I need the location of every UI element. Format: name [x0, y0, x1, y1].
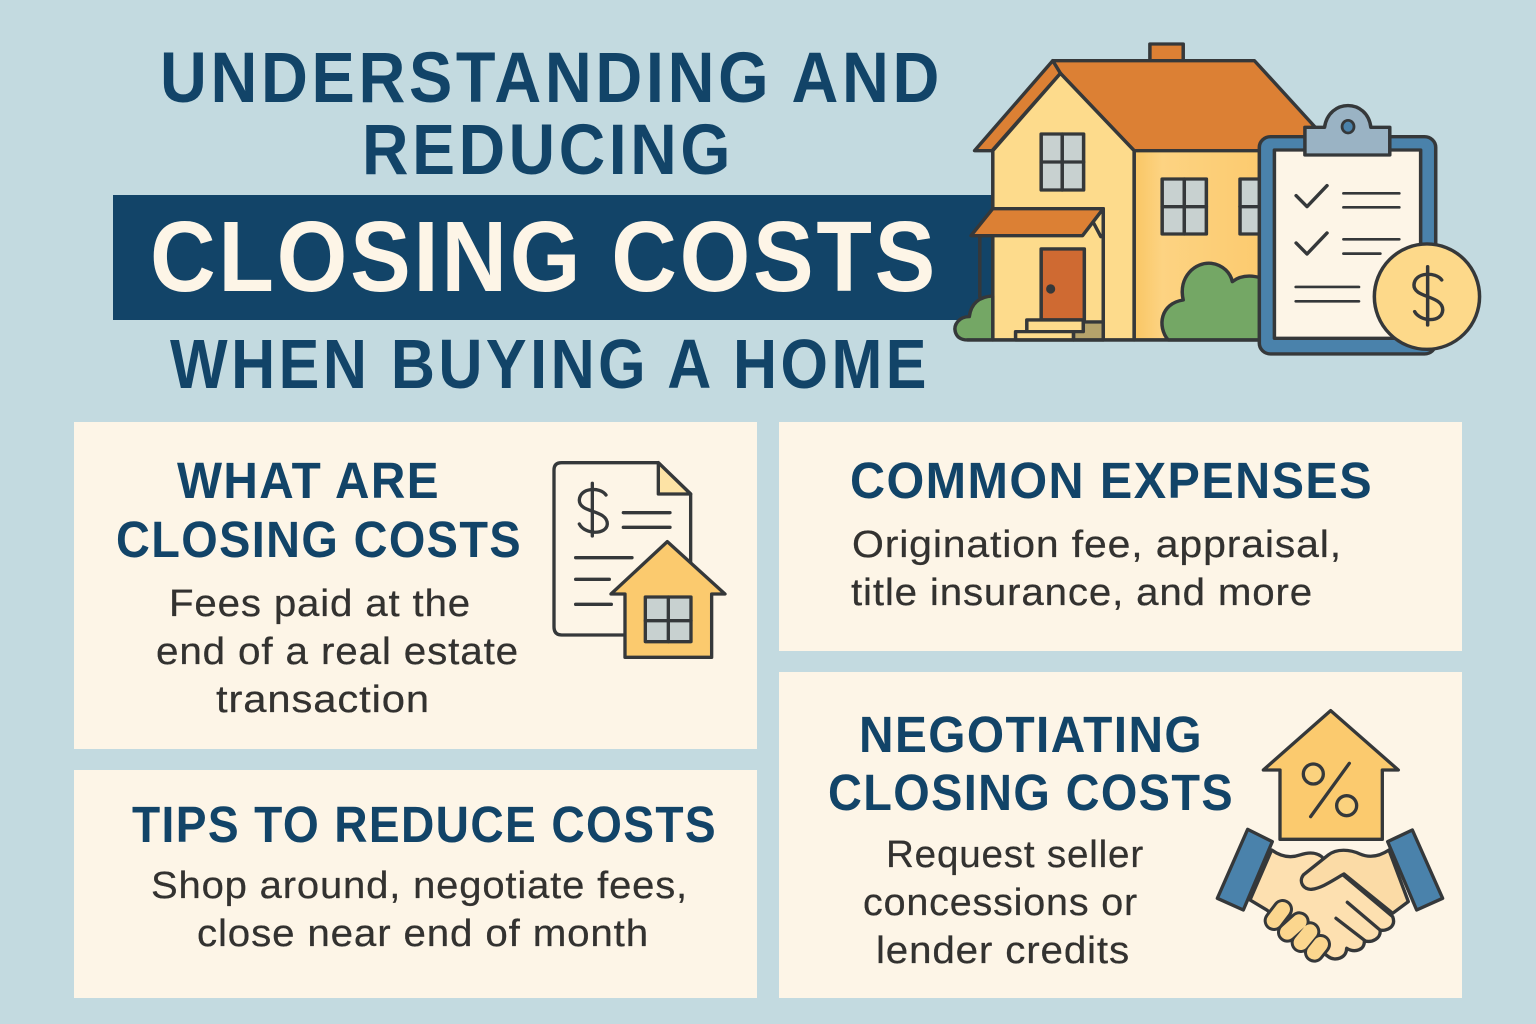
icon: dollar coin [1374, 244, 1480, 349]
icon: middle window [1162, 179, 1206, 234]
icon: right window [1240, 179, 1272, 234]
text block: Request seller [886, 834, 1144, 876]
icon: clipboard clip [1305, 106, 1390, 155]
heading [828, 706, 1234, 821]
text block: close near end of month [197, 913, 649, 955]
panel: common expenses [779, 422, 1462, 651]
text block: Shop around, negotiate fees, [151, 865, 688, 907]
text block [151, 865, 688, 955]
icon: house roof [975, 61, 1315, 151]
heading: NEGOTIATING [859, 706, 1203, 763]
icon: clipboard board [1259, 137, 1436, 354]
heading: CLOSING COSTS [828, 764, 1234, 821]
text block: end of a real estate [156, 631, 519, 673]
icon: handshake [1217, 829, 1443, 959]
icon: upper window [1041, 134, 1084, 190]
icon: roof ridge line [1053, 61, 1060, 73]
text block: transaction [216, 679, 430, 721]
icon: document with house [554, 463, 725, 657]
icon: right bush [1162, 263, 1262, 340]
heading [116, 452, 522, 568]
title line 4: WHEN BUYING A HOME [170, 325, 930, 403]
text block: Fees paid at the [169, 583, 471, 625]
heading: WHAT ARE [177, 452, 440, 509]
text block: title insurance, and more [851, 572, 1313, 614]
icon: steps [1016, 320, 1103, 340]
text block [851, 524, 1342, 614]
heading: COMMON EXPENSES [850, 452, 1373, 509]
icon: left bush [955, 296, 993, 340]
title [113, 39, 993, 403]
icon: porch [971, 209, 1103, 340]
icon: house with percent and handshake [1217, 711, 1443, 959]
icon: right wall [1134, 151, 1274, 340]
panel: negotiating closing costs [779, 672, 1462, 998]
icon: percent house [1263, 711, 1398, 839]
icon: checklist [1296, 186, 1399, 301]
text block: concessions or [863, 882, 1138, 924]
icon: chimney [1150, 44, 1183, 64]
illustration: house with clipboard [955, 44, 1480, 354]
text block [863, 834, 1144, 972]
icon: gable wall [993, 73, 1134, 340]
icon: door [1041, 249, 1084, 320]
title line 2: REDUCING [362, 111, 734, 190]
icon: porch post [975, 236, 985, 297]
panel: what are closing costs [74, 422, 757, 749]
title line 1: UNDERSTANDING AND [160, 39, 943, 118]
title banner: CLOSING COSTS [150, 201, 938, 313]
text block: Origination fee, appraisal, [852, 524, 1342, 566]
icon: clipboard paper [1274, 150, 1421, 338]
icon: ground line [968, 335, 1266, 345]
text block [156, 583, 519, 721]
heading: CLOSING COSTS [116, 511, 522, 568]
panel: tips to reduce costs [74, 770, 757, 998]
heading: TIPS TO REDUCE COSTS [132, 796, 717, 853]
text block: lender credits [876, 930, 1130, 972]
